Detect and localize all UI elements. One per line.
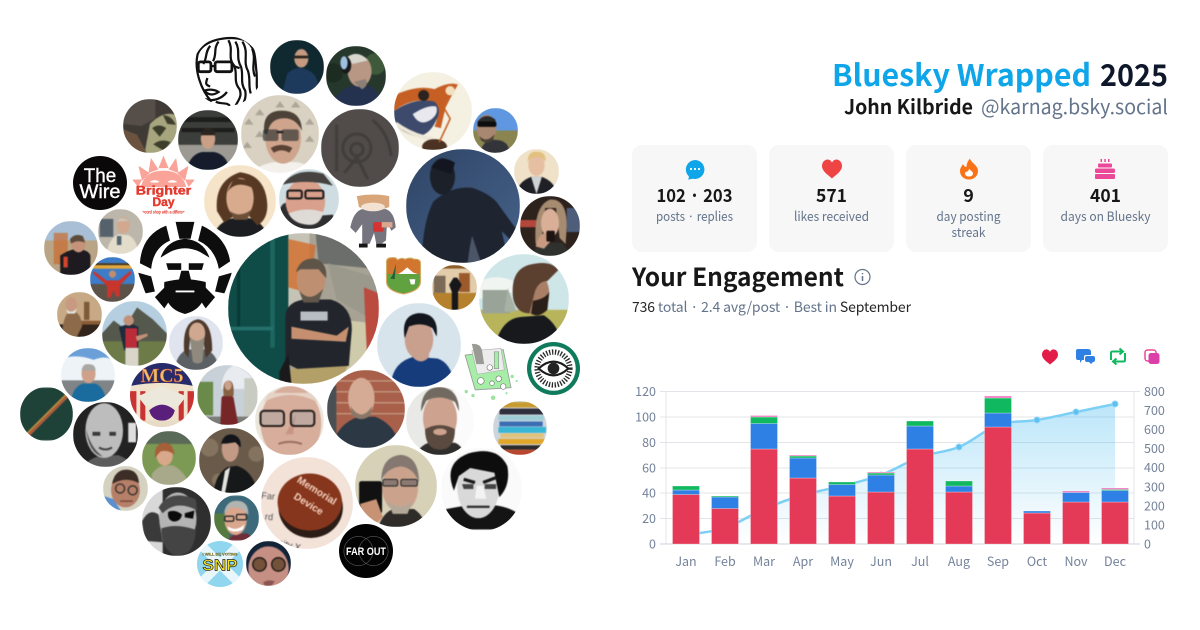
month labels: Sep	[987, 551, 1009, 570]
avatar: man with headphones	[326, 46, 386, 106]
icon: flame	[960, 158, 978, 180]
avatar: woman in red coat outdoors	[197, 365, 258, 425]
avatar: bearded man in sunglasses, greyscale	[142, 487, 211, 556]
stat card: streak: day posting	[936, 206, 1001, 225]
avatar: Brighter Day logo	[132, 156, 194, 215]
profile name and handle	[844, 91, 1168, 120]
stacked bars	[672, 396, 1128, 544]
avatar: stack of books	[493, 401, 547, 455]
avatar: bald man, brick wall	[327, 370, 405, 448]
icon: info	[855, 270, 870, 284]
avatar: black and white close-up	[446, 450, 516, 530]
legend: quotes squares	[1145, 350, 1160, 364]
avatar: Memorial Device badge: Device	[291, 491, 325, 518]
avatar: man at stone circle	[479, 254, 569, 344]
profile name and handle: John Kilbride	[844, 91, 973, 120]
avatar: dark grey texture	[321, 109, 399, 187]
avatar: man taking a mirror selfie	[355, 445, 437, 527]
stat card: days on Bluesky: days on Bluesky	[1060, 206, 1151, 225]
month labels: Nov	[1064, 551, 1088, 570]
avatar: man on mountain summit	[90, 257, 135, 302]
month labels: Jul	[911, 551, 929, 570]
avatar: painted face with glasses	[103, 466, 148, 511]
avatar: child in a field	[142, 431, 196, 485]
avatar: green with rainbow stripe	[20, 387, 73, 441]
cumulative line	[686, 404, 1115, 535]
month labels: Dec	[1104, 551, 1127, 570]
avatar: man with long grey beard	[169, 316, 223, 370]
avatar: man in blue tee	[377, 303, 461, 387]
stat card: likes	[769, 145, 894, 252]
avatar: greyscale bald man	[73, 402, 138, 467]
avatar: man in dark jacket	[270, 40, 324, 94]
avatar: person drinking	[520, 196, 580, 256]
month labels: May	[830, 551, 854, 570]
right axis labels: 700	[1144, 400, 1165, 419]
right axis labels: 0	[1144, 534, 1151, 552]
avatar: The Wire logo: Wire	[79, 181, 121, 203]
month labels: Oct	[1027, 551, 1047, 570]
right axis labels: 600	[1144, 419, 1165, 438]
right axis labels: 500	[1144, 438, 1165, 457]
avatar: man in blue polo	[61, 348, 115, 402]
right axis labels: 300	[1144, 476, 1165, 496]
month labels: Jun	[870, 551, 892, 570]
avatar: figure in wood-floored room	[432, 265, 477, 310]
avatar: blond man in blazer	[514, 149, 559, 194]
right axis labels: 100	[1144, 514, 1165, 534]
month labels: Aug	[948, 551, 970, 570]
heading: Your Engagement: Your Engagement	[631, 258, 844, 294]
avatar: MC5 poster: MC5	[141, 365, 184, 387]
stat card: posts and replies: 102 · 203	[656, 182, 732, 208]
avatar: man in black tee, red shirt interior	[44, 221, 98, 275]
title: Bluesky Wrapped	[832, 51, 1091, 95]
avatar: Memorial Device badge: rd	[265, 512, 274, 522]
avatar: sketch face	[196, 36, 258, 106]
stat card: likes: 571	[816, 182, 847, 208]
stat card: posts and replies	[632, 145, 757, 252]
avatar: man with grey beard, white wall	[406, 387, 462, 455]
avatar: Brighter Day logo: Day	[153, 195, 175, 209]
right axis labels: 400	[1144, 457, 1165, 476]
avatar: silhouette against the sky	[406, 149, 520, 263]
avatar: cat with camouflage	[123, 99, 177, 153]
stat card: streak	[906, 145, 1031, 252]
avatar: SNP sticker: SNP	[203, 557, 237, 574]
icon: chat bubble	[686, 160, 704, 180]
right axis labels: 200	[1144, 496, 1165, 514]
avatar: man with glasses and moustache	[241, 95, 319, 173]
avatar: MC5 poster	[130, 363, 194, 427]
avatar: man in interior with clock	[57, 292, 102, 337]
month labels: Apr	[793, 551, 813, 570]
legend: likes heart	[1042, 349, 1058, 365]
avatar: Memorial Device badge: Far	[261, 490, 275, 502]
month labels: Jan	[675, 551, 697, 570]
avatar: Memorial Device badge	[261, 457, 353, 549]
avatar: green floppy disk sticker	[464, 344, 518, 400]
right axis labels	[1144, 381, 1165, 552]
avatar: Far Out logo: FAR OUT	[346, 546, 386, 558]
title: 2025	[1100, 51, 1168, 95]
month labels	[675, 551, 1127, 570]
stat card: likes: likes received	[794, 206, 869, 225]
avatar: main photo, man by green door	[228, 233, 379, 384]
avatar: older man with glasses, close-up	[255, 386, 324, 455]
avatar: man in sunglasses under blue sky	[473, 108, 518, 153]
avatar: SNP sticker: I WILL BE VOTING	[203, 553, 238, 557]
avatar cluster	[20, 36, 580, 587]
left axis labels: 20	[642, 508, 656, 527]
stat card: days on Bluesky	[1043, 145, 1168, 252]
avatar: heavy black and white portrait	[138, 222, 232, 314]
stat card: streak: 9	[963, 182, 974, 208]
left axis labels: 0	[649, 534, 656, 552]
avatar: eye logo	[527, 342, 580, 395]
stat card: posts and replies: posts · replies	[656, 206, 733, 225]
avatar: man seated in dark shirt	[178, 110, 238, 170]
stat card: days on Bluesky: 401	[1090, 182, 1121, 208]
left axis labels: 80	[642, 432, 656, 451]
avatar: The Wire logo: The	[84, 165, 116, 187]
avatar: man with long curly hair	[204, 165, 276, 237]
avatar: smiling man with glasses	[214, 495, 259, 541]
avatar: man at Machu Picchu	[102, 301, 167, 366]
avatar: Brighter Day logo: a record shop with a difference	[138, 209, 189, 214]
avatar: man by stone wall	[199, 428, 264, 493]
chart legend icons	[1042, 348, 1160, 365]
engagement chart	[635, 381, 1165, 570]
avatar: older man in white vest	[98, 209, 143, 254]
avatar: man with hat and grey beard	[279, 169, 339, 229]
stat card: streak: streak	[952, 222, 986, 241]
left axis labels: 120	[635, 381, 656, 400]
month labels: Feb	[714, 551, 736, 570]
avatar: Far Out logo	[339, 524, 393, 578]
left axis labels: 40	[642, 482, 656, 502]
avatar: Memorial Device badge: Memorial	[295, 475, 338, 508]
left axis labels: 60	[642, 458, 656, 476]
profile name and handle: @karnag.bsky.social	[981, 91, 1168, 120]
avatar: The Wire logo	[73, 156, 127, 210]
icon: heart	[822, 160, 842, 178]
right axis labels: 800	[1144, 381, 1165, 400]
avatar: SNP sticker	[197, 541, 243, 587]
left axis labels	[635, 381, 656, 552]
left axis labels: 100	[635, 406, 656, 426]
legend: replies bubbles	[1076, 349, 1095, 364]
icon: birthday cake	[1095, 159, 1115, 179]
avatar: shield badge	[386, 257, 422, 294]
avatar: Brighter Day logo: Brighter	[136, 184, 192, 198]
legend: reposts arrows	[1111, 348, 1125, 364]
avatar: close-up with tinted glasses	[246, 541, 291, 586]
avatar: painted portrait	[394, 72, 472, 150]
engagement summary: 736 total · 2.4 avg/post · Best in September	[632, 297, 912, 317]
month labels: Mar	[753, 551, 775, 570]
avatar: dog in tracksuit	[350, 194, 396, 248]
